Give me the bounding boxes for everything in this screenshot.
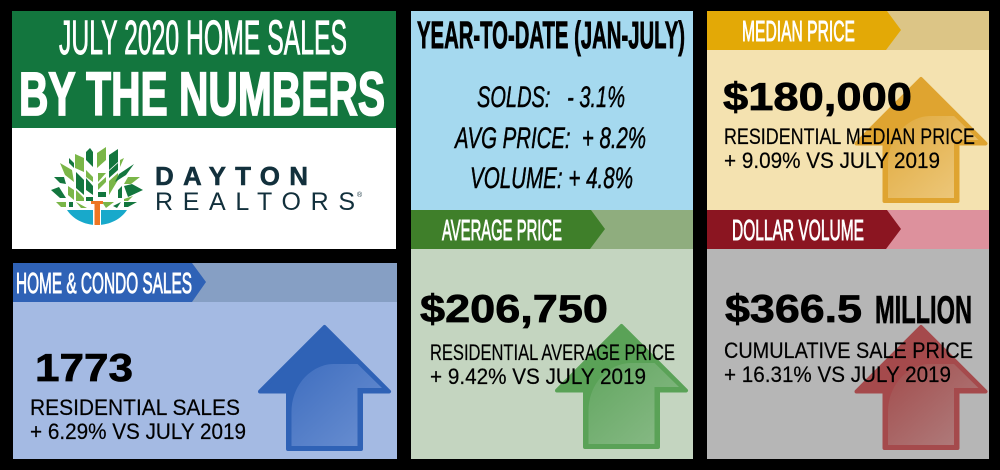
- logo wordmark: ®: [357, 191, 363, 199]
- icon: up arrow: [856, 327, 986, 448]
- stat text: RESIDENTIAL SALES: [30, 395, 240, 420]
- stat text: [723, 76, 975, 173]
- stat text: + 9.09% VS JULY 2019: [724, 148, 940, 173]
- stat text: + 6.29% VS JULY 2019: [30, 419, 246, 444]
- title banner: BY THE NUMBERS: [19, 60, 385, 128]
- logo wordmark: REALTORS: [155, 188, 355, 216]
- stat text: [724, 288, 973, 387]
- stat text: RESIDENTIAL AVERAGE PRICE: [430, 340, 675, 365]
- panel: dollar volume: [707, 210, 989, 459]
- year to date stats: SOLDS: - 3.1%: [477, 81, 625, 114]
- heading ribbon: MEDIAN PRICE: [742, 16, 855, 48]
- heading ribbon: DOLLAR VOLUME: [732, 215, 864, 247]
- stat text: [30, 347, 246, 444]
- panel: average price: [411, 210, 693, 459]
- stat text: $180,000: [723, 76, 912, 119]
- stat text: 1773: [35, 347, 133, 390]
- title banner: [12, 11, 396, 128]
- logo wordmark: DAYTON: [155, 161, 308, 191]
- year to date stats: [454, 81, 646, 195]
- heading ribbon: HOME & CONDO SALES: [16, 268, 192, 300]
- stat text: $366.5: [725, 288, 862, 331]
- icon: up arrow: [557, 326, 686, 447]
- year to date stats: AVG PRICE: + 8.2%: [454, 122, 646, 155]
- year to date stats: VOLUME: + 4.8%: [470, 162, 633, 195]
- logo wordmark: [155, 161, 363, 216]
- stat text: + 16.31% VS JULY 2019: [724, 362, 951, 387]
- title banner: JULY 2020 HOME SALES: [59, 12, 347, 65]
- heading ribbon: [13, 263, 206, 302]
- heading ribbon: AVERAGE PRICE: [442, 215, 562, 247]
- stat text: CUMULATIVE SALE PRICE: [724, 338, 973, 363]
- heading ribbon: [707, 11, 901, 50]
- icon: Dayton Realtors tree logo: [51, 147, 143, 226]
- icon: up arrow: [856, 79, 986, 201]
- panel: median price: [707, 11, 989, 210]
- panel: title and logo: [12, 11, 396, 249]
- icon: up arrow: [260, 327, 389, 449]
- heading ribbon: [411, 210, 605, 249]
- heading ribbon: [707, 210, 901, 249]
- panel: year to date: [411, 11, 693, 210]
- stat text: [420, 288, 675, 389]
- stat text: + 9.42% VS JULY 2019: [430, 364, 646, 389]
- panel: year to date: YEAR-TO-DATE (JAN-JULY): [417, 15, 685, 57]
- stat text: $206,750: [420, 288, 608, 331]
- panel: home and condo sales: [13, 263, 397, 459]
